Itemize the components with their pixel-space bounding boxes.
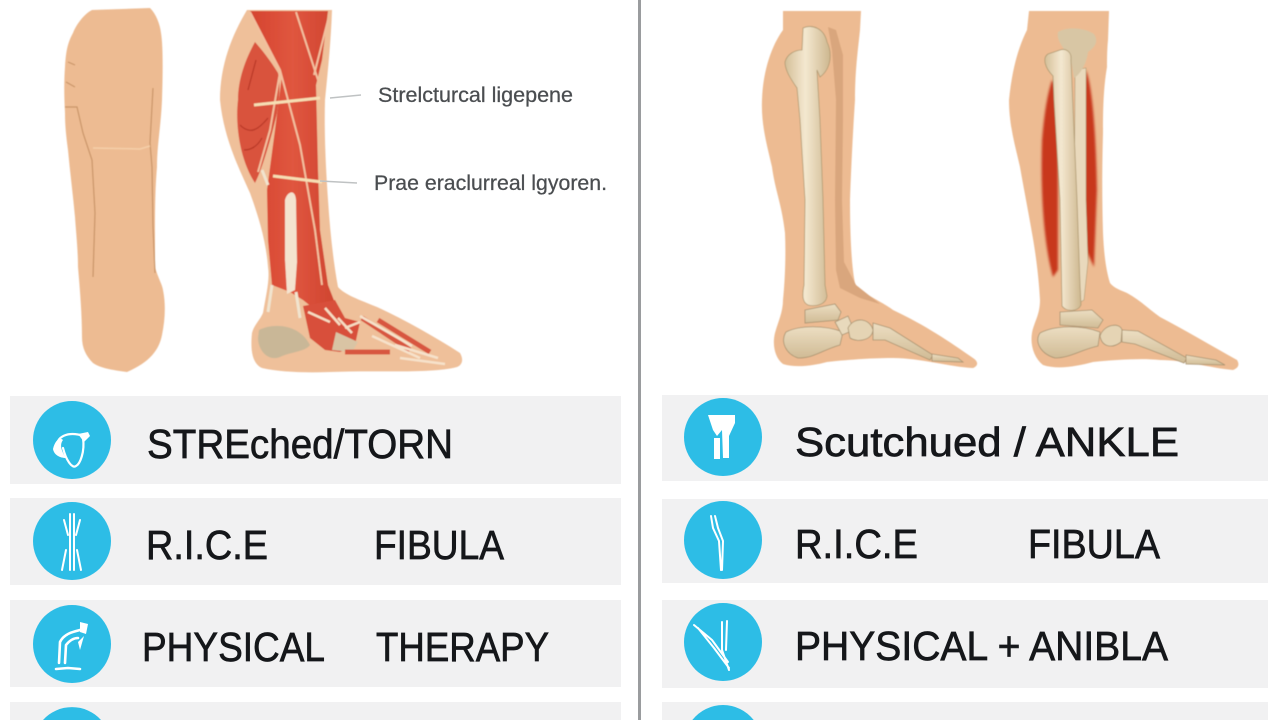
icon: bone bbox=[684, 398, 762, 476]
panel: right row 3 bbox=[662, 600, 1268, 688]
row text: Scutchued / ANKLE bbox=[795, 419, 1179, 465]
panel: right row 4 bbox=[662, 702, 1268, 720]
centre divider bbox=[638, 0, 641, 720]
ankle and foot bones bbox=[1038, 310, 1225, 365]
callout: lower ligament label: Prae eraclurreal lgyoren. bbox=[374, 172, 607, 195]
row text: THERAPY bbox=[376, 624, 549, 670]
icon: bent limb bbox=[684, 603, 762, 681]
red muscle strips bbox=[1042, 80, 1058, 277]
row text bbox=[795, 521, 1161, 567]
heel bone bbox=[258, 326, 310, 358]
illustration: leg skeleton with inflamed muscles bbox=[1009, 11, 1238, 370]
icon: cropped circle bbox=[43, 707, 101, 720]
pale bone strip bbox=[285, 192, 297, 294]
illustration: leg skeleton bbox=[762, 11, 977, 368]
panel: left row 3 bbox=[10, 600, 621, 687]
fibula shadow bbox=[828, 27, 880, 304]
skin outline bbox=[220, 10, 462, 372]
skin bbox=[1009, 11, 1238, 370]
icon: single bone bbox=[684, 501, 762, 579]
row text: R.I.C.E bbox=[795, 521, 918, 567]
panel: left row 4 bbox=[10, 702, 621, 720]
row text: PHYSICAL + ANIBLA bbox=[795, 623, 1169, 669]
panel: left row 2 bbox=[10, 498, 621, 585]
ankle and foot bones bbox=[784, 304, 963, 362]
metatarsal strips bbox=[345, 318, 430, 352]
main bone bbox=[1045, 49, 1081, 310]
upper calf muscle bbox=[237, 42, 279, 183]
upper bone head bbox=[1058, 28, 1096, 78]
panel: right row 1 bbox=[662, 395, 1268, 481]
icon: ankle joint bbox=[33, 401, 111, 479]
row text bbox=[146, 522, 505, 568]
row text: FIBULA bbox=[374, 522, 505, 568]
ankle tangle bbox=[303, 300, 360, 352]
yellow ligament bars bbox=[254, 98, 322, 182]
fibula bbox=[1074, 68, 1088, 306]
tendons bbox=[250, 12, 328, 285]
row text: PHYSICAL bbox=[142, 624, 325, 670]
icon: leg bones bbox=[33, 502, 111, 580]
icon: person bending bbox=[33, 605, 111, 683]
callout: upper ligament label: Strelcturcal ligepene bbox=[378, 84, 573, 107]
tibia bbox=[785, 27, 830, 306]
row text: FIBULA bbox=[1028, 521, 1161, 567]
mid-foot bone bbox=[332, 332, 358, 352]
skin bbox=[762, 11, 977, 368]
panel: left row 1 bbox=[10, 396, 621, 484]
row text: STREched/TORN bbox=[147, 421, 453, 467]
illustration: plain leg silhouette bbox=[64, 8, 165, 372]
main muscle group bbox=[250, 11, 335, 312]
row text bbox=[142, 624, 549, 670]
panel: right row 2 bbox=[662, 499, 1268, 583]
icon: cropped circle bbox=[692, 705, 754, 720]
row text: R.I.C.E bbox=[146, 522, 268, 568]
illustration: leg with muscles and ligaments bbox=[220, 10, 462, 372]
